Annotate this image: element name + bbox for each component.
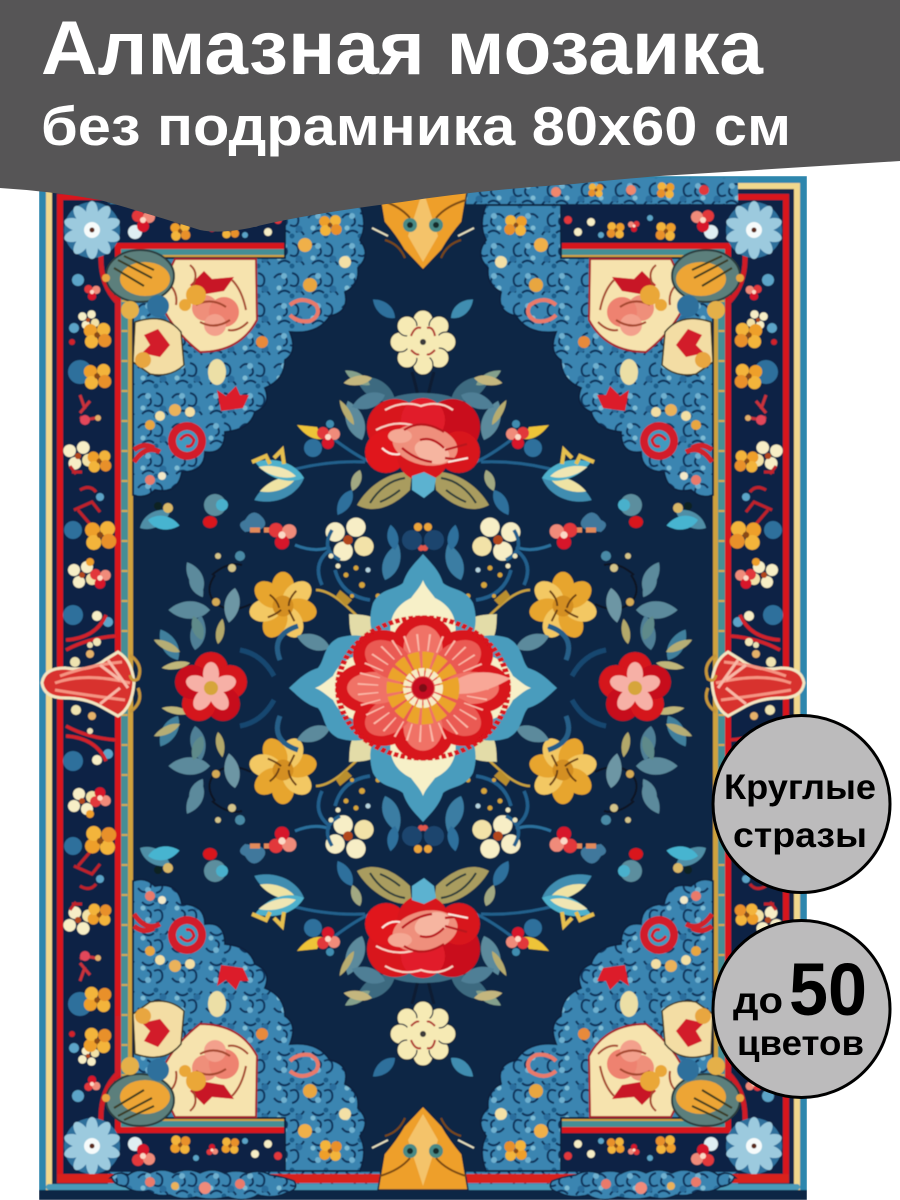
badge: up to 50 colors: 50 [789,948,867,1031]
bottom scalloped band left [110,1170,296,1200]
badge: round rhinestones: стразы [733,816,867,855]
badge: up to 50 colors: до [733,980,783,1021]
header banner [0,0,900,232]
badge: round rhinestones: Круглые [724,768,876,807]
bottom frame: teal band [46,1184,800,1190]
left red flower and border ornament [42,638,247,721]
diamond mosaic carpet image [39,176,807,1200]
badge: round rhinestones [713,716,890,892]
bottom frame: red band [57,1174,789,1183]
subtitle: без подрамника 80х60 см [41,95,791,157]
bottom outer margin [39,1190,807,1200]
carpet quarter: bottom left [39,688,432,1200]
central flower [289,554,557,822]
badge: up to 50 colors [713,920,890,1098]
carpet quarter: bottom right [414,688,807,1200]
bottom scalloped band right [550,1170,736,1200]
right red flower and border ornament [599,638,804,721]
carpet quarter: top right [414,176,807,688]
bottom medallion, cream flower and red rose [365,878,480,1190]
badge: up to 50 colors: цветов [737,1024,864,1063]
top medallion, cream flower and red rose [365,186,480,498]
carpet quarter: top left [39,176,432,688]
title: Алмазная мозаика [41,6,764,91]
